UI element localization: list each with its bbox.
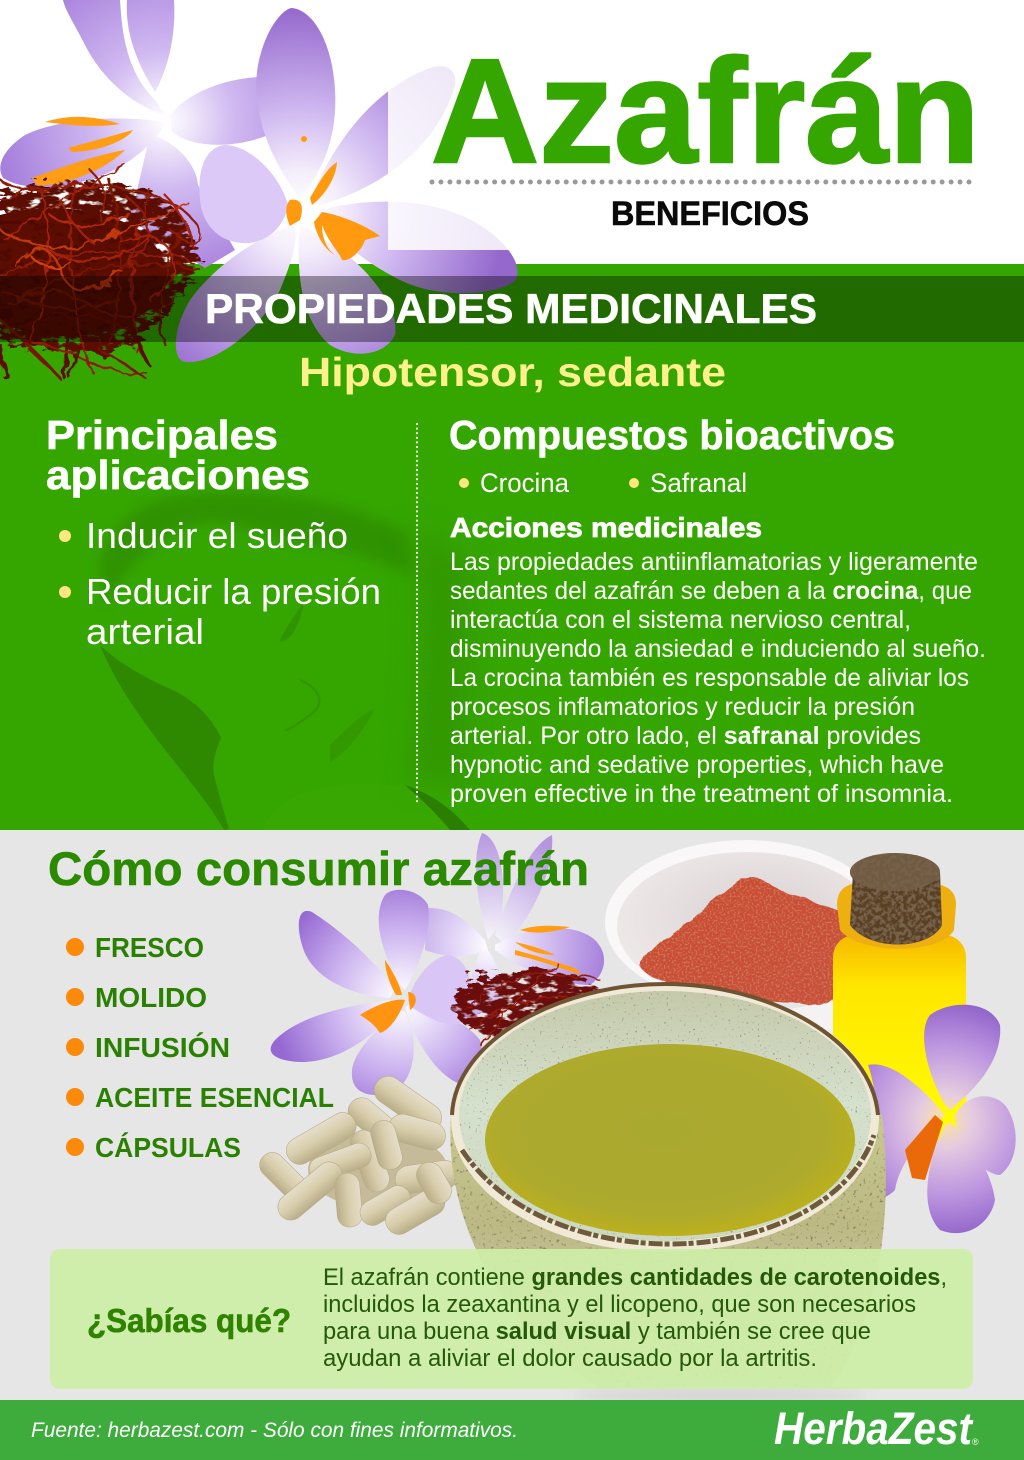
list: consumption forms xyxy=(66,932,334,1163)
subtitle: benefits: BENEFICIOS xyxy=(611,195,809,233)
band: dark strip xyxy=(0,276,1024,342)
heading: main applications xyxy=(46,412,310,498)
item: essential oil: ACEITE ESENCIAL xyxy=(95,1082,334,1113)
text block: medicinal actions description: disminuyendo la ansiedad e induciendo al sueño. xyxy=(450,635,986,663)
header white veil xyxy=(388,0,1024,250)
image: bottom right crocus flower xyxy=(868,1005,1016,1233)
image: back crocus flower consumption xyxy=(425,833,604,1020)
item: infusion: INFUSIÓN xyxy=(95,1032,230,1063)
text block: medicinal actions description: La crocina también es responsable de aliviar los xyxy=(450,664,969,692)
heading: hypotensive, sedative: Hipotensor, sedante xyxy=(299,349,726,395)
image: back crocus flower header xyxy=(0,0,268,268)
stigma: orange threads front flower xyxy=(286,136,380,260)
text block: medicinal actions description xyxy=(450,548,986,808)
callout heading: ¿Sabías qué? xyxy=(87,1302,291,1339)
compound: safranal: Safranal xyxy=(650,468,747,498)
compound: crocin: Crocina xyxy=(480,468,570,498)
image: sleeping woman silhouette xyxy=(100,492,470,830)
logo: HerbaZest: ® xyxy=(972,1437,979,1447)
list: application 2: Reducir la presión xyxy=(86,571,381,612)
item: fresh: FRESCO xyxy=(95,932,204,963)
shadow under cup xyxy=(570,1389,870,1401)
heading: how to consume saffron: Cómo consumir azafrán xyxy=(48,842,589,895)
background: white header xyxy=(0,0,1024,264)
image: tea cup with saffron infusion xyxy=(450,984,886,1388)
text block: medicinal actions description: hypnotic and sedative properties, which have xyxy=(450,751,944,779)
image: front crocus flower consumption xyxy=(271,890,482,1095)
text block: medicinal actions description: procesos inflamatorios y reducir la presión xyxy=(450,693,915,721)
image: oil bottle with cork xyxy=(833,853,966,1140)
list: application 2: arterial xyxy=(86,611,204,652)
callout text: El azafrán contiene grandes cantidades de carotenoides, xyxy=(323,1264,947,1291)
text block: medicinal actions description: proven effective in the treatment of insomnia. xyxy=(450,780,953,808)
stigma: orange threads back flower xyxy=(32,117,133,186)
panel: how to consume background xyxy=(0,830,1024,1400)
callout text: para una buena salud visual y también se cree que xyxy=(323,1318,871,1345)
panel: bioactive compounds xyxy=(449,412,986,808)
callout text: ayudan a aliviar el dolor causado por la artritis. xyxy=(323,1345,817,1372)
panel: medicinal properties background xyxy=(0,264,1024,830)
item: ground: MOLIDO xyxy=(95,982,207,1013)
callout text xyxy=(323,1264,947,1372)
heading: main applications: aplicaciones xyxy=(46,452,310,498)
heading: bioactive compounds: Compuestos bioactivos xyxy=(449,412,895,458)
text block: medicinal actions description: sedantes del azafrán se deben a la crocina, que xyxy=(450,577,972,605)
text block: medicinal actions description: interactúa con el sistema nervioso central, xyxy=(450,606,911,634)
image: front crocus flower header xyxy=(176,8,518,362)
footer source text: Fuente: herbazest.com - Sólo con fines informativos. xyxy=(31,1419,518,1442)
dotted rule under title xyxy=(432,180,972,184)
image: capsules pile xyxy=(255,1071,461,1239)
callout text: incluidos la zeaxantina y el licopeno, que son necesarios xyxy=(323,1291,916,1318)
text block: medicinal actions description: arterial. Por otro lado, el safranal provides xyxy=(450,722,921,750)
image: bowl of saffron powder xyxy=(605,840,885,1040)
list: application 2 xyxy=(59,571,381,652)
logo: HerbaZest: HerbaZest xyxy=(774,1403,974,1454)
panel: main applications xyxy=(46,412,381,652)
callout: did you know xyxy=(50,1249,973,1389)
footer bar xyxy=(0,1400,1024,1460)
heading: main applications: Principales xyxy=(46,412,278,458)
title: Azafrán xyxy=(431,29,980,194)
list: application 1: Inducir el sueño xyxy=(86,515,348,556)
image: small saffron pile xyxy=(452,965,610,1045)
heading: medicinal properties: PROPIEDADES MEDICINALES xyxy=(205,285,817,332)
heading: medicinal actions: Acciones medicinales xyxy=(450,512,762,543)
powder mound xyxy=(640,878,850,1003)
item: capsules: CÁPSULAS xyxy=(95,1132,241,1163)
text block: medicinal actions description: Las propiedades antiinflamatorias y ligeramente xyxy=(450,548,978,576)
stigma xyxy=(905,1115,943,1180)
cork xyxy=(850,872,942,945)
image: saffron threads pile header xyxy=(0,165,203,378)
